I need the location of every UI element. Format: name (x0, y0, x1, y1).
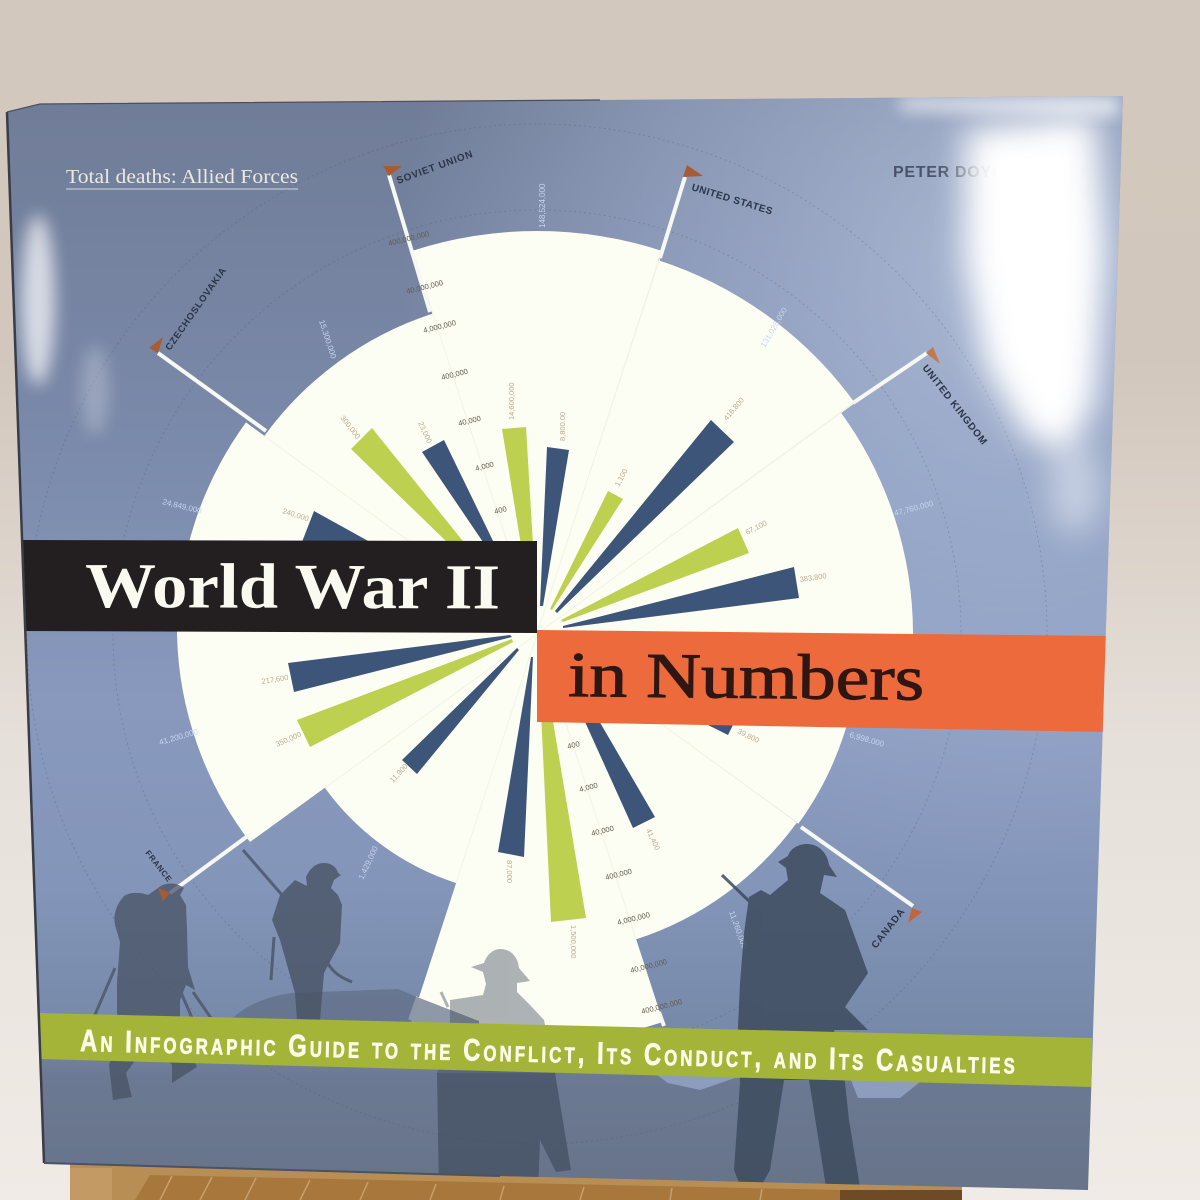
ground hill silhouette (234, 989, 479, 1024)
soldier silhouette 1 (94, 884, 211, 1100)
bars: navy series (288, 420, 799, 857)
bar value labels: 1,500,000 (569, 925, 578, 958)
bar value labels: 11,900 (388, 762, 410, 784)
scale labels: 400 (493, 504, 508, 516)
polar chart sectors (177, 231, 913, 1042)
country labels: SOVIET UNION (395, 149, 475, 187)
outer total labels: 47,760,000 (893, 499, 935, 518)
outer total labels: 148,524,000 (538, 183, 547, 228)
bar value labels: 350,000 (274, 730, 303, 749)
scale labels: 40,000 (590, 824, 615, 838)
country labels: UNITED KINGDOM (920, 363, 989, 448)
dotted scale rings (27, 124, 1047, 1144)
bar value labels: 8,800.00 (558, 412, 567, 441)
scale labels: 400,000 (440, 367, 469, 382)
bar value labels: 87,000 (505, 860, 514, 883)
scale labels: 4,000 (578, 781, 599, 794)
glare highlights (21, 96, 1120, 535)
soldier silhouette 3 (437, 949, 571, 1190)
scale labels: 400 (566, 739, 581, 751)
author name: PETER DOYLE (893, 164, 1013, 181)
bar value labels: 383,800 (799, 571, 827, 584)
soldier silhouette 2 (243, 850, 352, 1020)
title text: in Numbers: in Numbers (568, 639, 925, 714)
scale labels: 4,000,000 (422, 318, 457, 335)
scale labels: 40,000,000 (629, 957, 668, 975)
country labels: CANADA (870, 906, 908, 951)
scale labels: 4,000 (474, 460, 495, 473)
bars: green series (297, 427, 749, 922)
faint radial gridlines (264, 258, 853, 939)
book edges (7, 100, 600, 1176)
outer total labels: 6,998,000 (848, 730, 886, 749)
outer total labels: 15,300,000 (317, 319, 338, 360)
France label: FRANCE (143, 849, 174, 884)
scale labels: 4,000,000 (616, 910, 651, 927)
bar value labels: 1,100 (613, 467, 630, 488)
soldier silhouette 4 (722, 844, 868, 1190)
soldier silhouette 3 lower (437, 1073, 571, 1177)
bar value labels: 14,600,000 (507, 382, 516, 420)
flag poles (158, 175, 927, 1026)
pale terrain below band (658, 1076, 920, 1098)
bar value labels (261, 382, 827, 958)
bar value labels: 217,600 (261, 673, 289, 686)
bar value labels: 300,000 (338, 414, 362, 441)
scale labels: 400,000,000 (640, 997, 683, 1016)
flags (149, 165, 940, 923)
scale labels: 400,000,000 (387, 229, 430, 248)
scale labels (387, 229, 683, 1016)
title band: orange (537, 630, 1106, 732)
subtitle band (39, 1013, 1092, 1087)
scale labels: 40,000 (457, 414, 482, 428)
bar value labels: 23,000 (416, 420, 434, 445)
bar value labels: 67,100 (744, 518, 768, 537)
country labels: CZECHOSLOVAKIA (163, 265, 229, 353)
caption: Total deaths: Total deaths: Allied Forces (66, 166, 298, 188)
bar value labels: 39,800 (736, 727, 761, 745)
outer total labels (158, 183, 935, 950)
outer total labels: 131,028,000 (759, 305, 789, 349)
bar value labels: 41,400 (644, 827, 662, 852)
wooden stand (70, 1160, 962, 1200)
outer total labels: 41,200,000 (158, 727, 200, 747)
bar value labels: 416,800 (722, 396, 746, 422)
outer total labels: 11,260,000 (727, 910, 749, 950)
France flag (158, 888, 170, 901)
scale labels: 400,000 (604, 867, 633, 882)
country labels: UNITED STATES (690, 182, 774, 218)
title band: black (21, 540, 537, 633)
outer total labels: 24,849,000 (162, 497, 203, 516)
bar value labels: 240,000 (281, 506, 310, 523)
title text: World War II: World War II (85, 550, 500, 622)
scale labels: 40,000,000 (405, 278, 444, 296)
outer total labels: 1,429,000 (357, 844, 380, 881)
country labels (163, 149, 989, 951)
